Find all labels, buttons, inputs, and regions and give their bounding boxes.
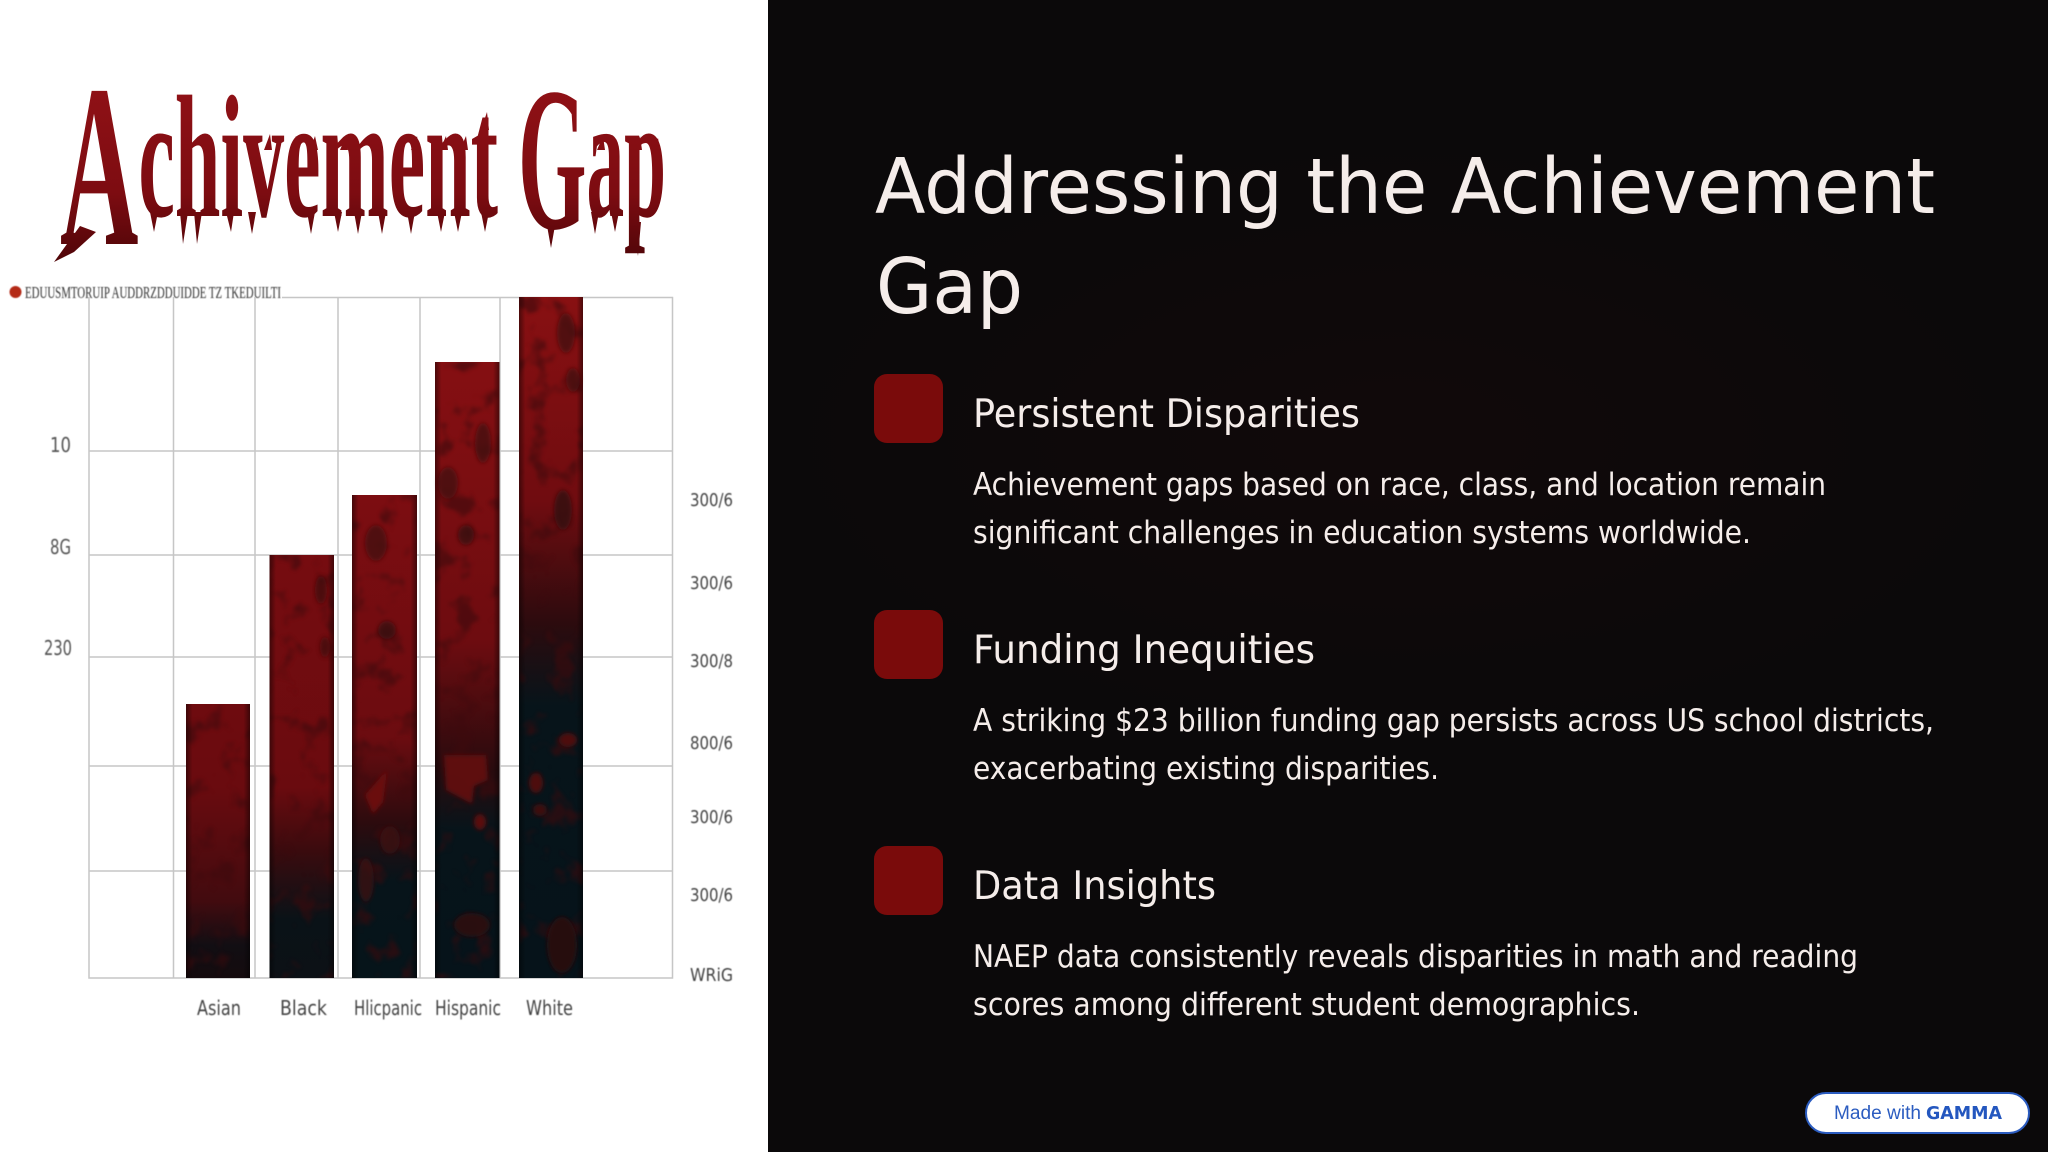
left axis labels: 230 xyxy=(44,636,72,660)
right axis labels: 300/6 xyxy=(690,807,733,828)
description: Persistent Disparities: significant challenges in education systems worldwide. xyxy=(973,515,1751,551)
description: Data Insights: scores among different student demographics. xyxy=(973,987,1640,1023)
main heading xyxy=(875,143,1935,332)
category labels: Asian xyxy=(197,996,241,1020)
right axis labels: 300/6 xyxy=(690,573,733,594)
gothic chart title xyxy=(54,38,666,295)
bar: Asian xyxy=(186,704,250,978)
right axis labels: 800/6 xyxy=(690,733,733,754)
gothic chart title: A xyxy=(60,38,138,295)
bar: Black xyxy=(270,555,334,978)
dark background panel xyxy=(768,0,2048,1152)
heading: Funding Inequities: Funding Inequities xyxy=(973,628,1315,673)
category labels xyxy=(197,996,573,1020)
category labels: Hlicpanic xyxy=(354,996,422,1020)
item: Persistent Disparities xyxy=(874,374,1826,551)
left axis labels xyxy=(44,433,72,660)
category labels: Black xyxy=(280,996,327,1020)
right axis labels: 300/6 xyxy=(690,490,733,511)
description: Persistent Disparities: Achievement gaps based on race, class, and location remain xyxy=(973,467,1826,503)
description: Funding Inequities: exacerbating existing disparities. xyxy=(973,751,1439,787)
right axis labels: WRiG xyxy=(690,965,733,986)
right axis labels: 300/8 xyxy=(690,651,733,672)
main heading: Gap xyxy=(876,243,1023,332)
chart legend xyxy=(10,283,281,302)
left axis labels: 8G xyxy=(50,535,71,559)
description: Persistent Disparities xyxy=(973,467,1826,551)
description: Data Insights: NAEP data consistently reveals disparities in math and reading xyxy=(973,939,1858,975)
badge: Made with Gamma: GAMMA xyxy=(1926,1103,2002,1124)
icon: red square xyxy=(874,610,943,679)
gothic chart title: chivement xyxy=(138,60,498,254)
gothic chart title: G xyxy=(518,46,587,273)
left axis labels: 10 xyxy=(50,433,71,457)
item: Data Insights xyxy=(874,846,1858,1023)
right axis labels xyxy=(690,490,733,986)
badge: Made with Gamma: Made with xyxy=(1834,1103,1921,1124)
chart grid xyxy=(89,297,672,978)
bar: White xyxy=(519,297,583,978)
image panel: achievement gap chart: ap xyxy=(587,60,666,254)
heading: Persistent Disparities: Persistent Disparities xyxy=(973,392,1360,437)
description: Funding Inequities xyxy=(973,703,1934,787)
bar: Hispanic second xyxy=(435,362,500,978)
chart legend: EDUUSMTORUIP AUDDRZDDUIDDE TZ TKEDUILTI xyxy=(25,283,281,302)
item: Funding Inequities xyxy=(874,610,1934,787)
badge: Made with Gamma xyxy=(1806,1093,2029,1133)
image panel: achievement gap chart xyxy=(0,0,768,1152)
main heading: Addressing the Achievement xyxy=(875,143,1935,232)
icon: red square xyxy=(874,846,943,915)
right axis labels: 300/6 xyxy=(690,885,733,906)
category labels: White xyxy=(526,996,573,1020)
category labels: Hispanic xyxy=(435,996,501,1020)
bar: Hispanic xyxy=(352,495,417,978)
heading: Data Insights: Data Insights xyxy=(973,864,1216,909)
icon: red square xyxy=(874,374,943,443)
description: Funding Inequities: A striking $23 billion funding gap persists across US school districts, xyxy=(973,703,1934,739)
description: Data Insights xyxy=(973,939,1858,1023)
